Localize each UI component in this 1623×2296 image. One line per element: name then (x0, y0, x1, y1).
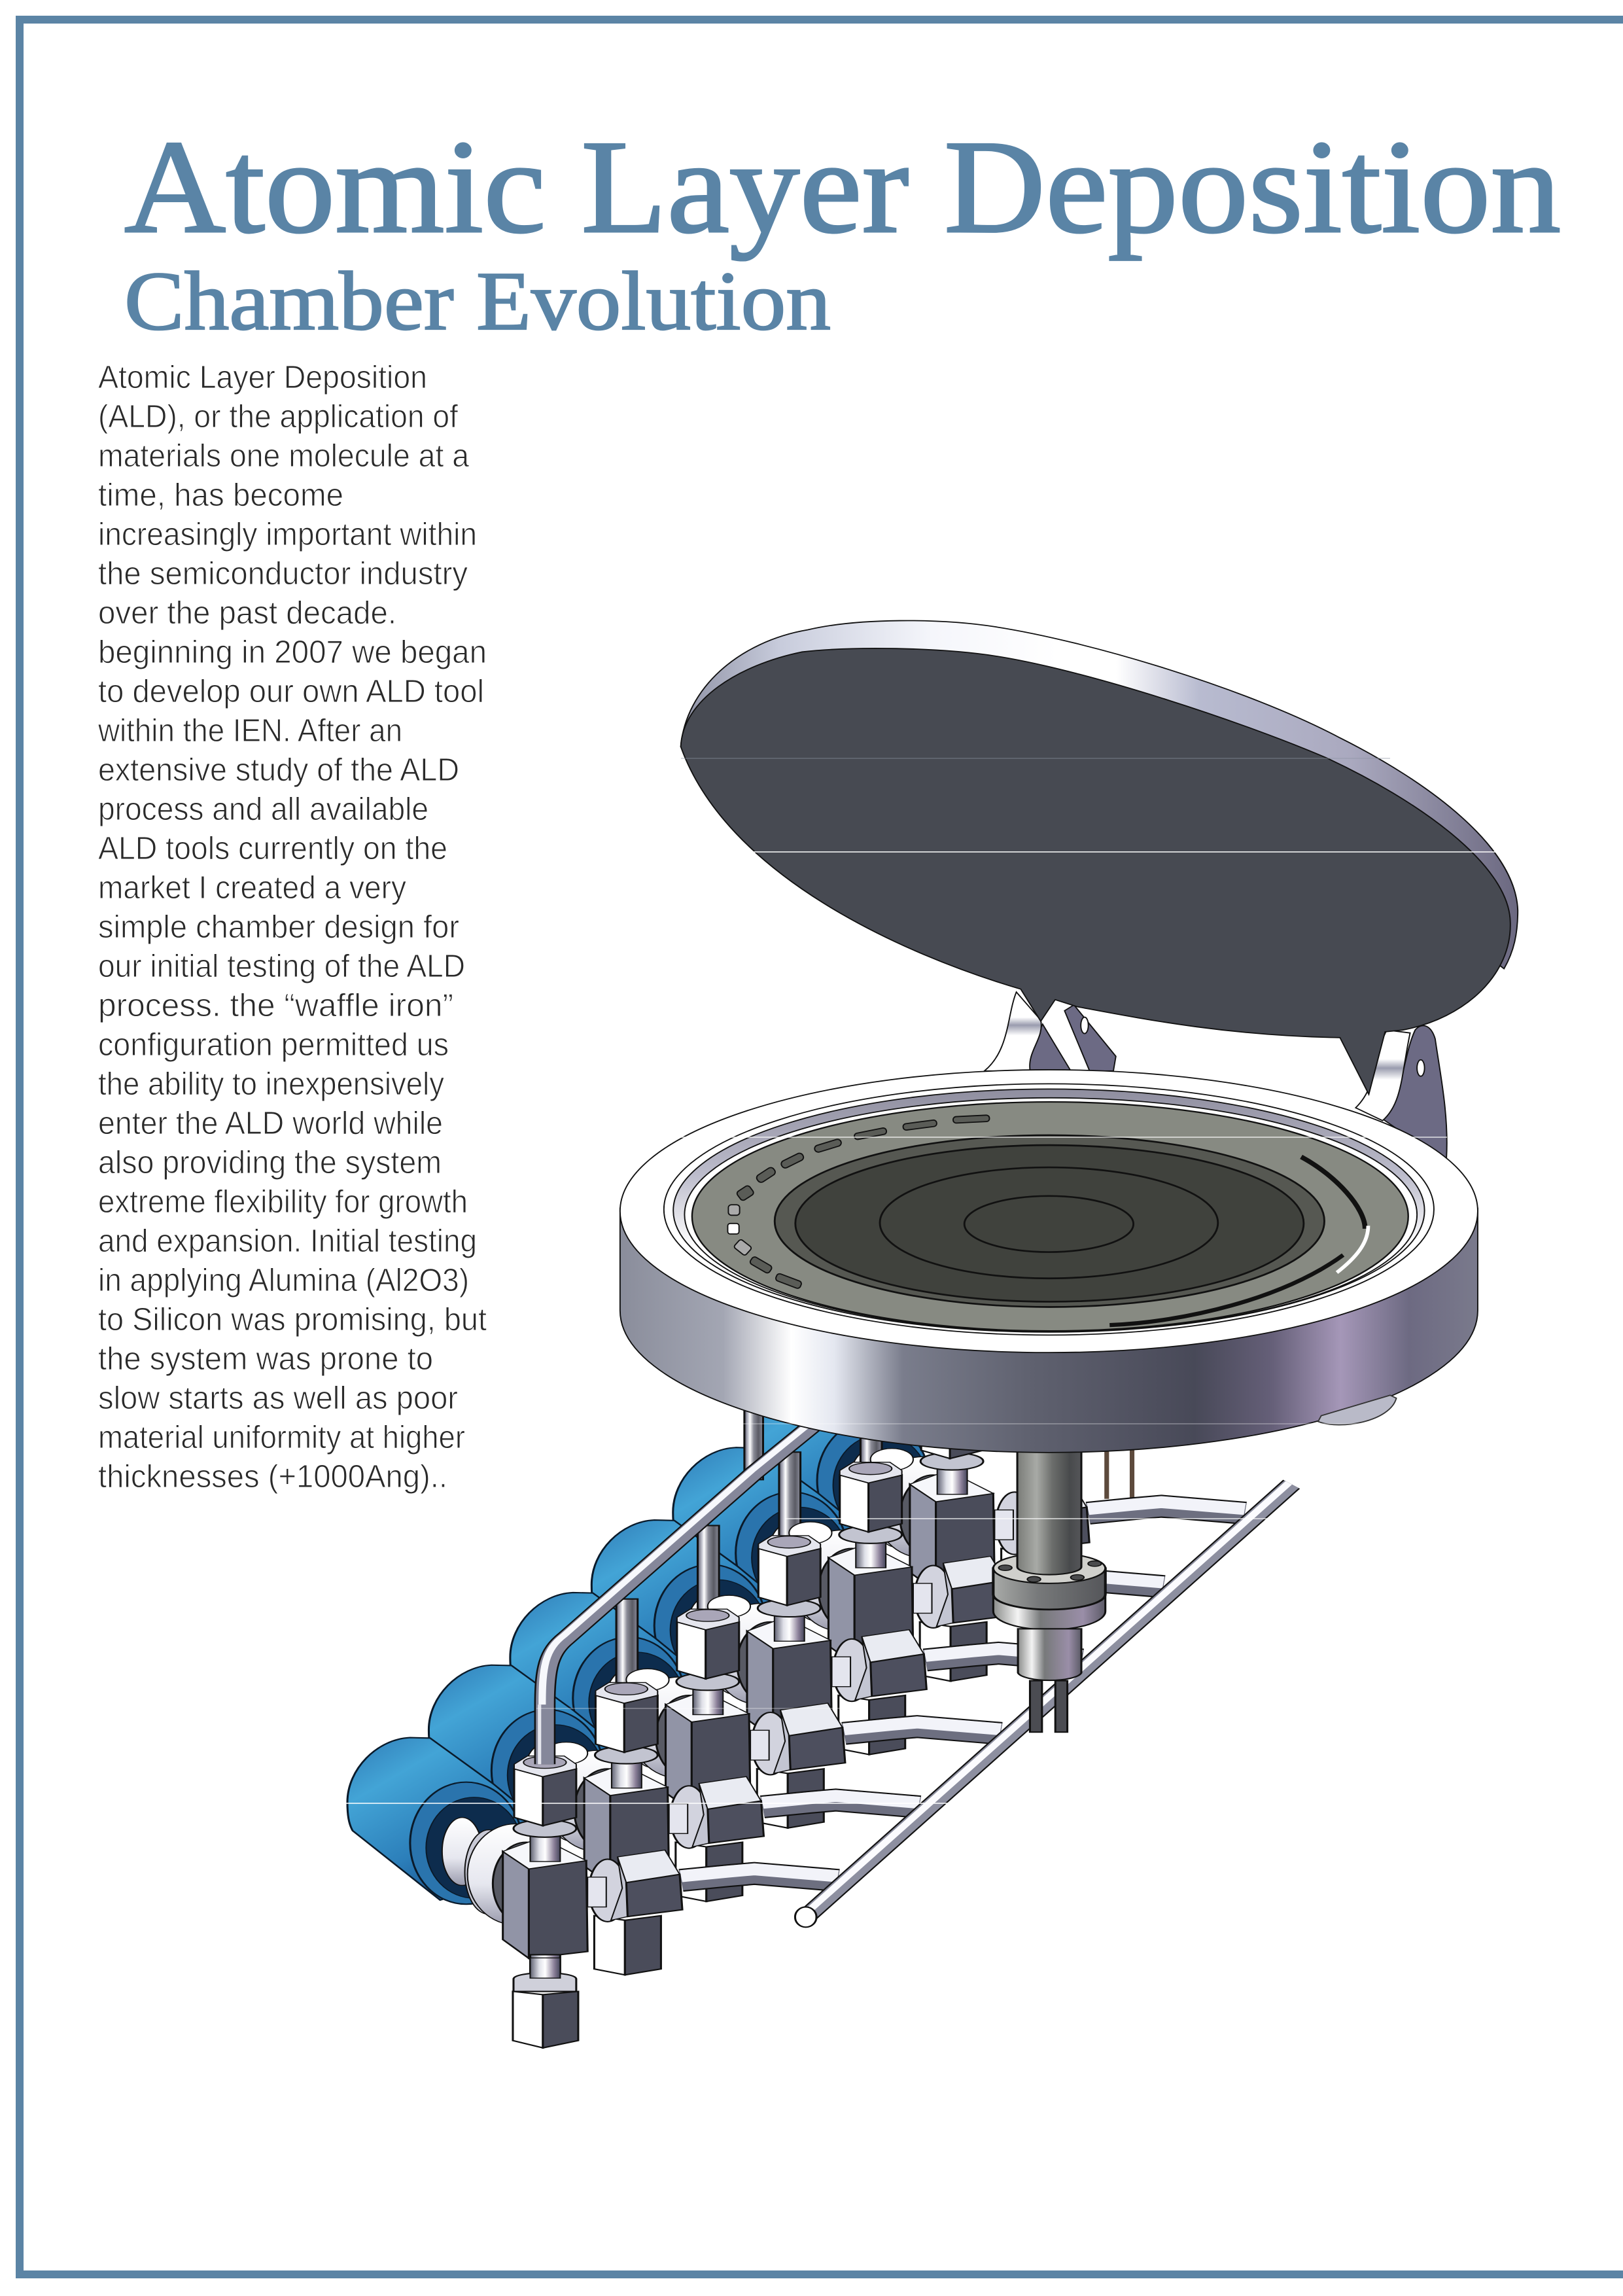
body text: over the past decade. (98, 595, 396, 631)
lid edge (681, 620, 1518, 968)
bottom fitting (513, 1954, 578, 2048)
body text: Atomic Layer Deposition (98, 360, 427, 395)
body text: to Silicon was promising, but (98, 1302, 487, 1337)
title: Atomic Layer Deposition (124, 113, 1561, 261)
body text: market I created a very (98, 870, 406, 906)
hinge arms (985, 992, 1410, 1121)
body text: beginning in 2007 we began (98, 635, 487, 670)
body text (97, 360, 487, 1494)
feedthrough shaft and flange (993, 1447, 1106, 1732)
body text: extreme flexibility for growth (98, 1184, 468, 1220)
body text: the semiconductor industry (98, 556, 468, 592)
diagonal supply rail (795, 1483, 1291, 1927)
rear vertical tube (744, 1406, 763, 1479)
illustration: chamber (620, 620, 1518, 1453)
chamber body side (620, 1209, 1478, 1453)
body text: the ability to inexpensively (98, 1067, 444, 1102)
lid underside (681, 648, 1510, 1094)
body text: and expansion. Initial testing (98, 1224, 477, 1259)
body text: extensive study of the ALD (98, 752, 459, 788)
body text: to develop our own ALD tool (98, 674, 484, 709)
illustration: gas manifold assembly (347, 1375, 1291, 2048)
body text: material uniformity at higher (98, 1420, 465, 1455)
bent purge tube (540, 1411, 828, 1764)
subtitle: Chamber Evolution (124, 255, 831, 347)
body text: within the IEN. After an (97, 713, 402, 749)
thin wires (1107, 1443, 1132, 1499)
body text: process and all available (98, 792, 428, 827)
body text: configuration permitted us (98, 1027, 449, 1063)
body text: our initial testing of the ALD (98, 949, 465, 984)
body text: simple chamber design for (98, 910, 459, 945)
body text: (ALD), or the application of (98, 399, 458, 434)
hinge rear fin (1027, 1005, 1447, 1159)
body text: time, has become (98, 478, 343, 513)
body text: also providing the system (98, 1145, 442, 1180)
body text: process. the “waffle iron” (98, 988, 453, 1023)
curved exhaust slits (1109, 1157, 1368, 1325)
body text: the system was prone to (98, 1341, 433, 1377)
valve blocks and fittings (442, 1375, 1245, 1975)
body text: thicknesses (+1000Ang).. (98, 1459, 447, 1494)
body text: in applying Alumina (Al2O3) (98, 1263, 469, 1298)
body text: enter the ALD world while (98, 1106, 443, 1141)
chamber top face and rings (620, 1070, 1478, 1352)
body text: increasingly important within (98, 517, 477, 552)
body text: materials one molecule at a (98, 438, 470, 474)
body text: slow starts as well as poor (98, 1381, 458, 1416)
blue valve actuators (347, 1375, 929, 1904)
gas slots (727, 1115, 990, 1289)
body text: ALD tools currently on the (98, 831, 447, 866)
bottom knob (1318, 1395, 1397, 1425)
